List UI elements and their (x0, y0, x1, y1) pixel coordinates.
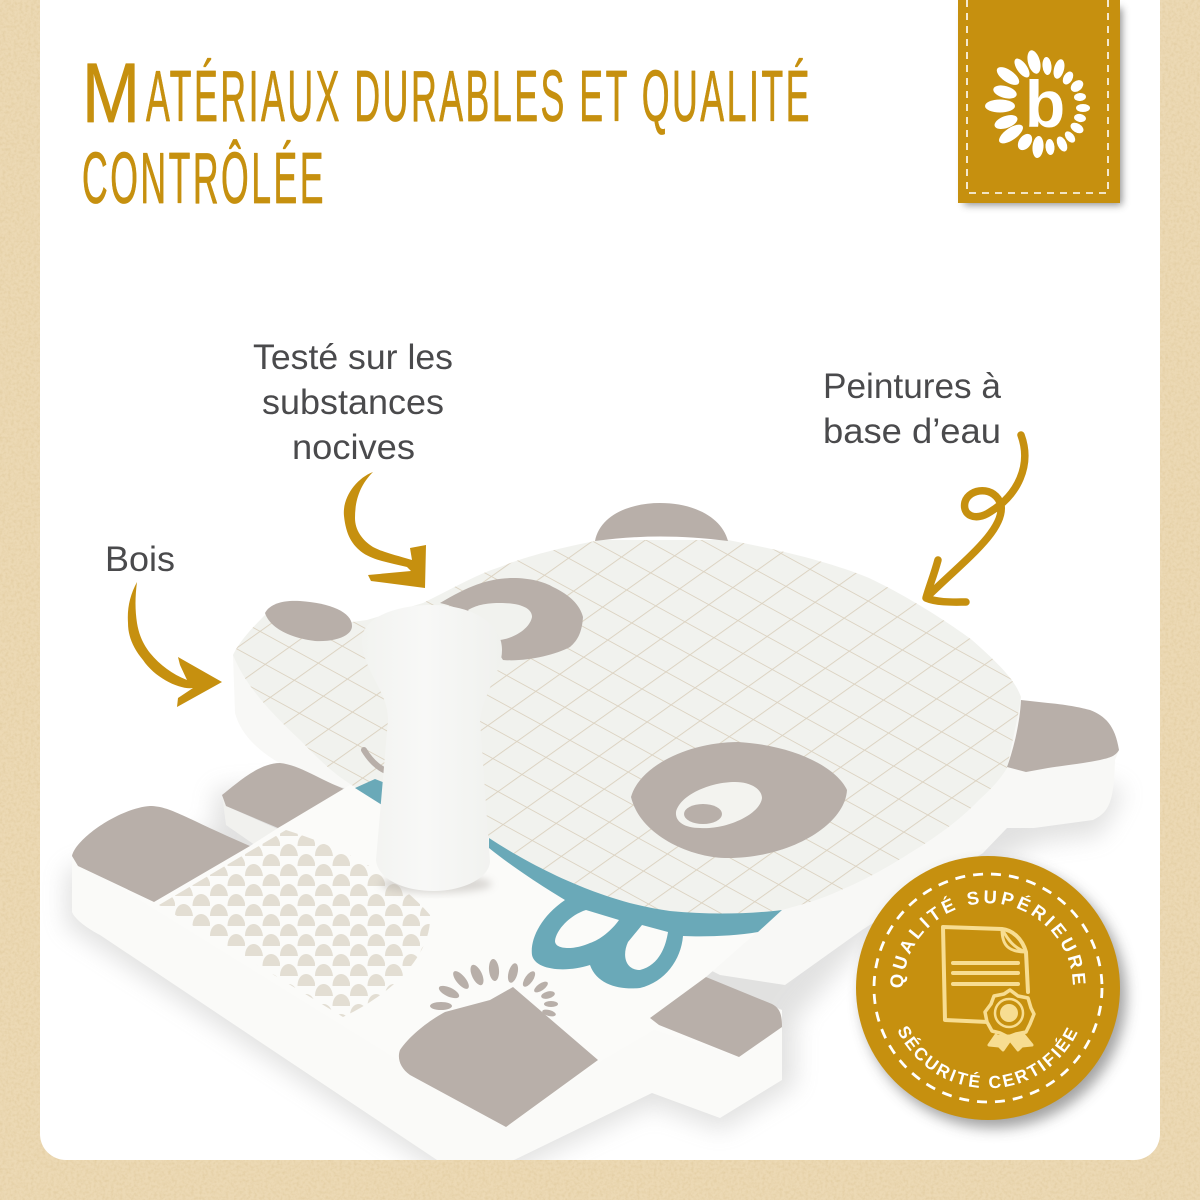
arrow: substances (344, 472, 426, 588)
label: Testé sur les substances nocives: substances (262, 383, 444, 422)
printed logo on toy (399, 959, 598, 1127)
icon: certificate (943, 927, 1034, 1050)
scale pattern on body (159, 830, 430, 1017)
label: Peintures à base d'eau (823, 367, 1002, 451)
body top face (142, 788, 782, 1057)
head top face with grid (220, 530, 1030, 930)
badge text bottom: SÉCURITÉ CERTIFIÉE (898, 1026, 1078, 1088)
logo tag (958, 0, 1122, 205)
upper paw of body (222, 763, 347, 850)
panda toy photo (66, 503, 1125, 1172)
small nose mark (364, 750, 388, 772)
label: Testé sur les substances nocives: Testé sur les (253, 338, 453, 377)
label: Testé sur les substances nocives: nocives (292, 428, 415, 467)
paws on body (72, 806, 782, 1057)
body side thickness (72, 858, 782, 1162)
panda ears (265, 503, 1119, 772)
badge text top: QUALITÉ SUPÉRIEURE (890, 890, 1086, 988)
head side thickness (233, 655, 1119, 985)
label: Testé sur les substances nocives (253, 338, 453, 467)
label: Peintures à base d'eau: Peintures à (823, 367, 1002, 406)
title: CONTRÔLÉE (82, 139, 326, 219)
title (82, 46, 812, 219)
label: Bois: Bois (105, 540, 175, 579)
left eye (440, 578, 583, 660)
title: M (82, 46, 140, 140)
quality badge (853, 855, 1135, 1137)
soft shadows (66, 760, 1125, 1172)
label: Peintures à base d'eau: base d’eau (823, 412, 1001, 451)
arrow: Bois (128, 582, 222, 707)
icon: logo sun: b (1025, 67, 1065, 141)
teal smile and bow (355, 779, 782, 988)
arrow: peintures (926, 435, 1025, 602)
icon: logo sun (985, 49, 1090, 158)
right eye (631, 742, 847, 858)
white peg (362, 605, 502, 893)
